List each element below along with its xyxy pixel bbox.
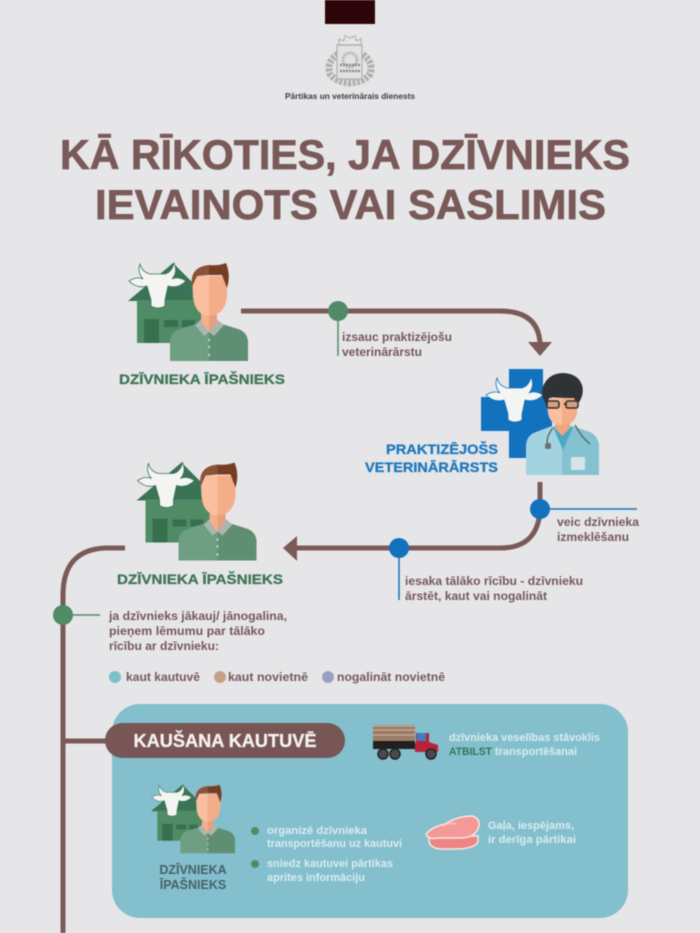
title: KĀ RĪKOTIES, JA DZĪVNIEKS [60, 131, 630, 178]
owner duties list: aprites informāciju [267, 872, 365, 884]
step: call veterinarian [328, 301, 452, 359]
step: recommend further action [389, 538, 583, 603]
step: examine animal: veic dzīvnieka [557, 517, 640, 529]
flow line: left trunk [63, 548, 125, 933]
icon: owner with farm 3 [151, 785, 235, 853]
meat text: ir derīga pārtikai [488, 834, 576, 846]
step: recommend further action: iesaka tālāko rīcību - dzīvnieku [405, 576, 583, 588]
icon: veterinarian with cross [481, 369, 599, 475]
owner duties list: organizē dzīvnieka [267, 825, 368, 837]
step: owner decides: ja dzīvnieks jākauj/ jānogalina, [108, 611, 287, 623]
heading: owner 2: DZĪVNIEKA ĪPAŠNIEKS [117, 570, 283, 587]
icon: owner with farm 1 [128, 263, 248, 361]
step: owner decides [53, 605, 287, 653]
legend: kaut novietnē [228, 672, 308, 684]
title: IEVAINOTS VAI SASLIMIS [95, 181, 606, 228]
step: examine animal: izmeklēšanu [557, 532, 629, 544]
step: examine animal [530, 499, 640, 544]
step: owner decides: rīcību ar dzīvnieku: [109, 641, 219, 653]
meat text [488, 820, 576, 846]
legend [109, 671, 445, 684]
owner duties list: transportēšanu uz kautuvi [267, 838, 402, 850]
heading: owner 3: DZĪVNIEKA [159, 863, 227, 877]
step: call veterinarian: izsauc praktizējošu [342, 332, 452, 344]
meat text: Gaļa, iespējams, [488, 820, 574, 832]
heading: owner 1: DZĪVNIEKA ĪPAŠNIEKS [119, 370, 285, 387]
flow arrow: veterinarian to owner [283, 482, 540, 561]
panel heading pill: KAUŠANA KAUTUVĒ [134, 730, 316, 751]
panel heading pill [105, 723, 345, 758]
heading: veterinarian: PRAKTIZĒJOŠS [386, 440, 498, 457]
heading: veterinarian [365, 440, 498, 475]
truck text: transportēšanai [495, 746, 577, 758]
agency name: Pārtikas un veterinārais dienests [285, 91, 415, 101]
logo: coat of arms and agency name [285, 36, 415, 101]
owner duties list [251, 825, 402, 884]
title [60, 131, 630, 228]
step: call veterinarian: veterinārārstu [342, 347, 422, 359]
icon: owner with farm 2 [136, 462, 256, 560]
truck text [449, 732, 600, 758]
heading: veterinarian: VETERINĀRĀRSTS [365, 459, 498, 475]
panel: slaughter at slaughterhouse [105, 704, 628, 918]
heading: owner 3 [159, 863, 227, 892]
flow arrow: owner to veterinarian [241, 311, 552, 356]
legend: kaut kautuvē [126, 672, 200, 684]
owner duties list: sniedz kautuvei pārtikas [267, 858, 393, 870]
truck text: dzīvnieka veselības stāvoklis [449, 732, 600, 744]
top dark tab [325, 0, 375, 24]
icon: coat of arms [329, 36, 371, 83]
step: recommend further action: ārstēt, kaut vai nogalināt [405, 591, 547, 603]
icon: truck [373, 725, 438, 759]
truck text: ATBILST [449, 746, 492, 758]
heading: owner 3: ĪPAŠNIEKS [159, 877, 226, 892]
icon: meat [426, 816, 479, 849]
legend: nogalināt novietnē [337, 672, 445, 684]
step: owner decides: pieņem lēmumu par tālāko [109, 626, 265, 638]
